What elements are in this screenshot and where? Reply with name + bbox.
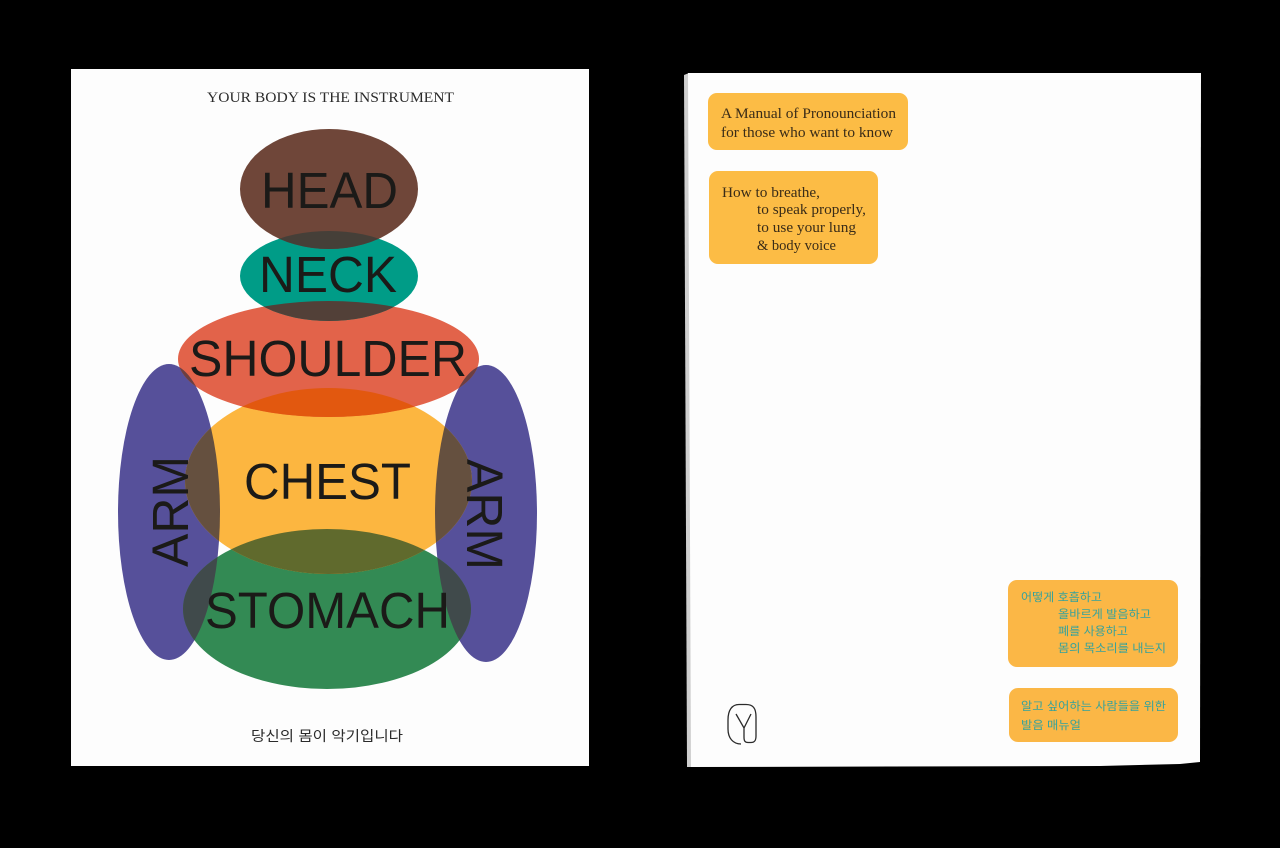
label: how to breathe: to speak properly, — [757, 202, 866, 218]
shape: neck — [240, 231, 418, 321]
overlap: stomach and chest — [231, 529, 424, 574]
overlap: right arm and chest — [435, 426, 472, 542]
icon: Y publisher logo — [728, 704, 756, 744]
overlap: left arm and chest — [185, 428, 220, 541]
shape: left arm — [118, 364, 220, 660]
label: how to breathe: How to breathe, — [722, 185, 820, 201]
label: Korean manual title — [1009, 688, 1178, 742]
overlap: left arm and shoulder — [180, 367, 196, 387]
overlap: head and neck — [279, 231, 379, 249]
label: Korean how to breathe: 어떻게 호흡하고 — [1021, 590, 1102, 604]
label: Korean manual title: 알고 싶어하는 사람들을 위한 — [1021, 699, 1166, 713]
front cover paper — [71, 69, 589, 766]
label: chest: CHEST — [244, 453, 411, 510]
back cover paper — [688, 73, 1201, 767]
label: Korean manual title: 발음 매뉴얼 — [1021, 718, 1081, 732]
back cover page edge — [684, 73, 693, 767]
label: how to breathe — [709, 171, 878, 264]
label: Korean how to breathe — [1008, 580, 1178, 667]
panel: back cover — [684, 73, 1201, 767]
overlap: stomach and left arm — [183, 557, 218, 640]
overlap: neck and shoulder — [264, 301, 394, 321]
label: neck: NECK — [259, 246, 397, 303]
label: head: HEAD — [261, 162, 398, 219]
cover subtitle in Korean: 당신의 몸이 악기입니다 — [251, 728, 403, 744]
label: Korean how to breathe: 올바르게 발음하고 — [1058, 607, 1151, 621]
shape: stomach — [183, 529, 471, 689]
panel: front cover — [71, 69, 589, 766]
label: how to breathe: to use your lung — [757, 220, 856, 236]
shape: shoulder — [178, 301, 479, 417]
label: Korean how to breathe: 폐를 사용하고 — [1058, 624, 1128, 638]
overlap: chest and shoulder — [242, 388, 414, 417]
label: right arm: ARM — [456, 459, 513, 570]
shape: right arm — [435, 365, 537, 662]
label: shoulder: SHOULDER — [189, 330, 467, 387]
shape: head — [240, 129, 418, 249]
body diagram — [118, 129, 537, 689]
label: manual title: for those who want to know — [721, 125, 894, 141]
label: how to breathe: & body voice — [757, 238, 836, 254]
label: stomach: STOMACH — [205, 582, 450, 639]
label: manual title — [708, 93, 908, 150]
cover title: YOUR BODY IS THE INSTRUMENT — [207, 90, 454, 106]
shape: chest — [185, 388, 472, 574]
overlap: stomach and right arm — [437, 558, 471, 640]
label: left arm: ARM — [142, 456, 199, 567]
overlap: right arm and shoulder — [458, 367, 478, 388]
label: Korean how to breathe: 몸의 목소리를 내는지 — [1058, 642, 1166, 655]
label: manual title: A Manual of Pronounciation — [721, 106, 897, 122]
